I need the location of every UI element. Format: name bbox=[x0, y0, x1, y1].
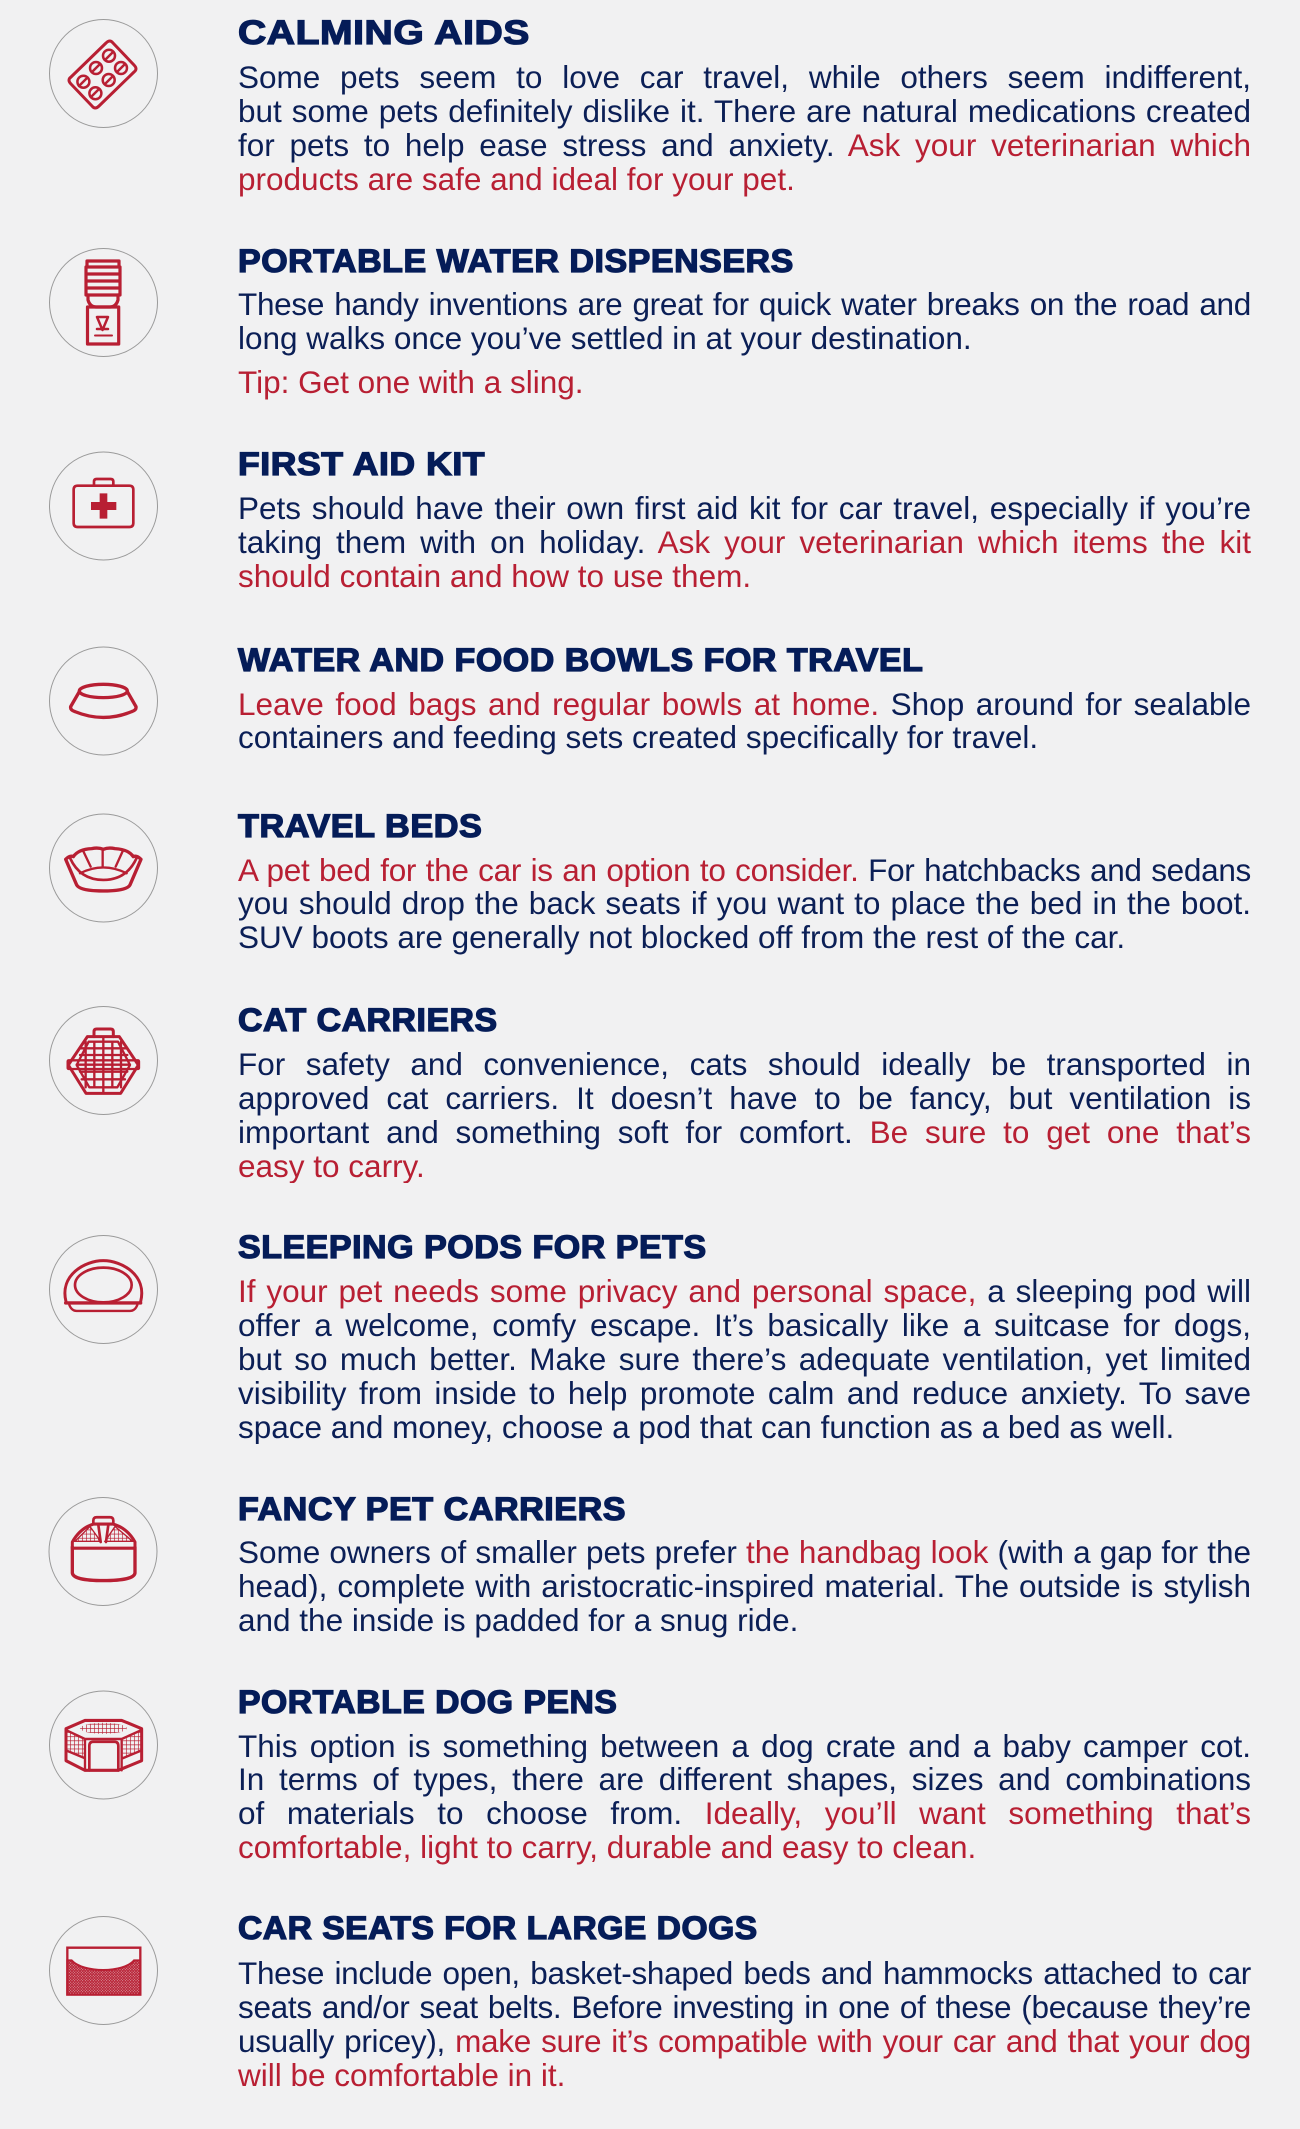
icon: pet bed bbox=[49, 814, 158, 922]
panel: sleeping pods bbox=[49, 1228, 1251, 1444]
heading: WATER AND FOOD BOWLS FOR TRAVEL bbox=[238, 642, 923, 678]
heading: FIRST AID KIT bbox=[238, 446, 485, 482]
text block bbox=[238, 288, 1251, 356]
heading: SLEEPING PODS FOR PETS bbox=[238, 1228, 707, 1264]
panel: water and food bowls bbox=[49, 642, 1251, 756]
text block bbox=[238, 1275, 1251, 1444]
heading: PORTABLE DOG PENS bbox=[238, 1684, 617, 1720]
panel: calming aids bbox=[49, 14, 1251, 197]
icon: hammock car seat bbox=[49, 1916, 158, 2025]
text block bbox=[238, 854, 1251, 955]
text block bbox=[238, 1048, 1251, 1183]
icon: cat carrier bbox=[49, 1006, 158, 1115]
text block bbox=[238, 1730, 1251, 1865]
heading: CAR SEATS FOR LARGE DOGS bbox=[238, 1910, 758, 1946]
panel: portable dog pens bbox=[49, 1684, 1251, 1865]
icon: blister pack of pills bbox=[49, 19, 158, 128]
text block bbox=[238, 61, 1251, 197]
panel: travel beds bbox=[49, 808, 1251, 955]
heading: CAT CARRIERS bbox=[238, 1002, 498, 1038]
text block bbox=[238, 492, 1251, 594]
heading: CALMING AIDS bbox=[238, 14, 530, 52]
heading: FANCY PET CARRIERS bbox=[238, 1491, 626, 1527]
icon: water dispenser bbox=[49, 248, 158, 357]
text block bbox=[238, 1536, 1251, 1638]
panel: car seats for large dogs bbox=[49, 1910, 1251, 2093]
heading: PORTABLE WATER DISPENSERS bbox=[238, 243, 794, 279]
panel: fancy pet carriers bbox=[48, 1491, 1251, 1638]
icon: dog pen bbox=[49, 1690, 158, 1800]
text block bbox=[238, 1957, 1251, 2093]
panel: portable water dispensers bbox=[49, 243, 1251, 400]
panel: cat carriers bbox=[49, 1002, 1251, 1183]
panel: first aid kit bbox=[49, 446, 1251, 594]
icon: pet bowl bbox=[49, 646, 158, 756]
text block bbox=[238, 688, 1251, 755]
icon: first aid case bbox=[49, 452, 158, 560]
heading: TRAVEL BEDS bbox=[238, 808, 482, 844]
icon: fancy carrier bbox=[48, 1497, 158, 1606]
icon: sleeping pod bbox=[49, 1235, 158, 1344]
